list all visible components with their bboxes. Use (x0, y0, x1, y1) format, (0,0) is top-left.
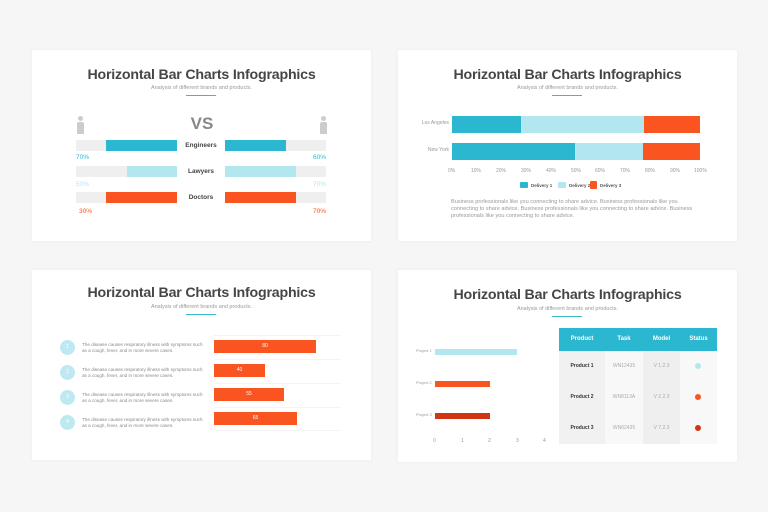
x axis labels: 50% (571, 168, 581, 174)
list items: 1 (66, 344, 69, 350)
list items: The disease causes respiratory illness with symptoms such (82, 392, 203, 397)
right bars (225, 140, 326, 203)
x axis labels: 40% (546, 168, 556, 174)
left bars (76, 140, 177, 203)
bar chart: 2 (488, 438, 491, 444)
list items: The disease causes respiratory illness with symptoms such (82, 367, 203, 372)
stacked bars (422, 116, 700, 160)
list items: The disease causes respiratory illness with symptoms such (82, 342, 203, 347)
bar chart: Project 2 (416, 380, 432, 385)
category labels: Lawyers (188, 168, 214, 175)
table: WN8113A (613, 394, 635, 400)
title: Horizontal Bar Charts Infographics (453, 287, 682, 303)
percentages left: 30% (79, 208, 92, 215)
subtitle: Analysis of different brands and products. (517, 306, 618, 312)
table (559, 328, 717, 444)
percentages left: 50% (76, 181, 89, 188)
bar chart (416, 348, 546, 444)
bars (214, 340, 316, 425)
percentages right: 70% (313, 181, 326, 188)
table: WN62435 (613, 425, 635, 431)
bars: 65 (253, 415, 258, 421)
panel: vs comparison (32, 50, 371, 241)
panel: chart and table (398, 270, 737, 462)
list items: as a cough, fever, and in more severe cases. (82, 398, 173, 402)
x axis labels (448, 168, 707, 174)
bar chart: 0 (433, 438, 436, 444)
list items: 3 (66, 394, 69, 400)
bar chart: Project 1 (416, 348, 432, 353)
title: Horizontal Bar Charts Infographics (453, 67, 682, 83)
x axis labels: 20% (496, 168, 506, 174)
x axis labels: 70% (620, 168, 630, 174)
title: Horizontal Bar Charts Infographics (87, 285, 316, 301)
stacked bars: Los Angeles (422, 120, 449, 126)
table: V 2.2.3 (654, 394, 669, 400)
table: V 1.2.3 (654, 363, 669, 369)
title: Horizontal Bar Charts Infographics (87, 67, 316, 83)
subtitle: Analysis of different brands and products. (517, 85, 618, 91)
description text: Business professionals like you connecting to share advice. Business professionals like you connecting to share advice. Business professionals like you connecting to share advice. Business professionals like you connecting to share advice. (451, 199, 692, 219)
table: Task (617, 336, 631, 342)
x axis labels: 10% (471, 168, 481, 174)
panel: numbered list bars (32, 270, 371, 460)
icon: person right (320, 116, 327, 134)
legend: Delivery 2 (569, 183, 590, 188)
table: Status (689, 336, 708, 342)
table: Product 2 (570, 394, 594, 400)
list items: as a cough, fever, and in more severe cases. (82, 348, 173, 352)
panel: stacked bar chart (398, 50, 737, 241)
list items: 4 (66, 419, 69, 425)
subtitle: Analysis of different brands and products. (151, 304, 252, 310)
x axis labels: 30% (521, 168, 531, 174)
x axis labels: 60% (595, 168, 605, 174)
table: Product (571, 336, 593, 342)
bars: 55 (246, 391, 252, 397)
table: WN12435 (613, 363, 635, 369)
table: Product 3 (570, 425, 594, 431)
percentages right: 70% (313, 208, 326, 215)
subtitle: Analysis of different brands and products. (151, 85, 252, 91)
percentages right: 60% (313, 154, 326, 161)
percentages left (76, 154, 92, 215)
list items: as a cough, fever, and in more severe cases. (82, 372, 173, 378)
table: V 7.2.3 (654, 425, 669, 431)
list items (60, 340, 203, 430)
list items: 2 (66, 369, 69, 375)
percentages right (313, 154, 326, 215)
x axis labels: 80% (645, 168, 655, 174)
bar chart: Project 3 (416, 412, 432, 417)
bar chart: 4 (543, 438, 546, 444)
bar chart: 1 (461, 438, 464, 444)
table: Model (653, 336, 670, 342)
bars: 80 (262, 343, 268, 349)
bars: 40 (237, 367, 242, 373)
stacked bars: New York (428, 147, 449, 153)
bar chart: 3 (516, 438, 519, 444)
category labels: Engineers (185, 142, 217, 149)
x axis labels: 90% (670, 168, 680, 174)
VS label: VS (191, 114, 213, 133)
x axis labels: 0% (448, 168, 455, 174)
icon: person left (77, 116, 84, 134)
grid lines (214, 335, 341, 431)
x axis labels: 100% (694, 168, 707, 174)
category labels (185, 142, 217, 201)
legend: Delivery 1 (531, 183, 552, 188)
legend (520, 181, 622, 189)
percentages left: 70% (76, 154, 89, 161)
list items: as a cough, fever, and in more severe cases. (82, 422, 173, 428)
table: Product 1 (570, 363, 594, 369)
list items: The disease causes respiratory illness with symptoms such (82, 417, 203, 422)
category labels: Doctors (189, 194, 213, 201)
legend: Delivery 3 (600, 183, 621, 188)
